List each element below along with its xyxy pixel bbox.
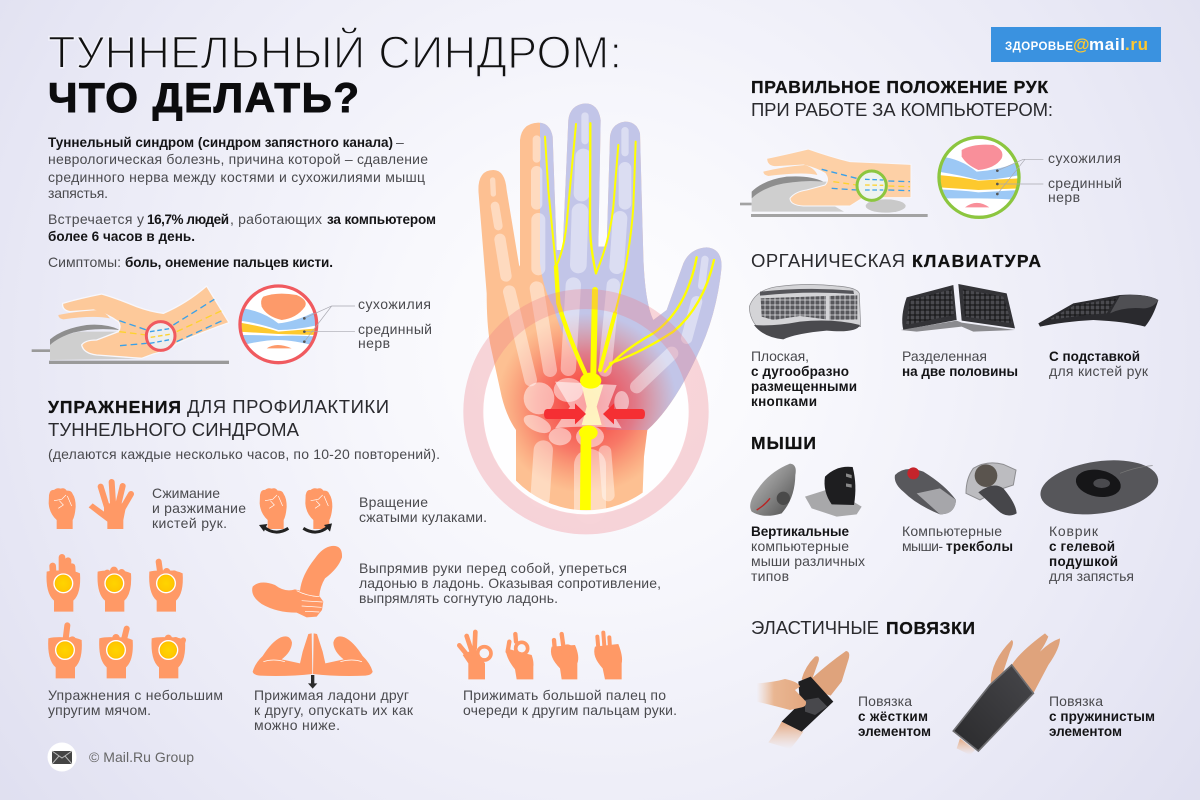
exercise captions: ладонью в ладонь. Оказывая сопротивление,	[359, 575, 661, 591]
bandage captions: с жёстким	[858, 709, 928, 724]
intro text: 16,7% людей	[147, 212, 229, 227]
icon: thumb to finger hands	[459, 632, 622, 679]
keyboard: with rest	[1038, 295, 1158, 327]
exercise captions: Сжимание	[152, 485, 220, 501]
compressed tunnel	[555, 382, 622, 428]
intro text: за компьютером	[327, 212, 436, 227]
heading: elastic bandages	[751, 617, 975, 638]
mice captions: компьютерные	[751, 538, 849, 554]
correct wrist labels: сухожилия	[1048, 150, 1121, 166]
mouse: vertical black	[805, 467, 862, 517]
keyboard captions: размещенными	[751, 379, 857, 394]
mice captions: трекболы	[946, 539, 1013, 554]
exercise captions: сжатыми кулаками.	[359, 509, 487, 525]
correct wrist labels	[1048, 150, 1122, 205]
logo: ЗДОРОВЬЕ	[1005, 41, 1073, 53]
wrist diagram: wrong position	[32, 286, 355, 364]
intro text: –	[396, 134, 404, 150]
heading: correct position: ПРАВИЛЬНОЕ ПОЛОЖЕНИЕ РУК	[751, 77, 1048, 97]
exercise captions	[48, 485, 677, 733]
ring background	[483, 308, 689, 515]
mice and pad photos	[750, 453, 1162, 521]
keyboard captions: Плоская,	[751, 348, 809, 364]
bandage captions: Повязка	[1049, 693, 1103, 709]
intro text	[48, 134, 436, 270]
bandage captions: элементом	[1049, 724, 1122, 739]
heading: correct position	[751, 77, 1053, 120]
mouse: vertical silver	[750, 464, 796, 516]
keyboard captions: для кистей рук	[1049, 363, 1149, 379]
bones	[493, 116, 705, 508]
wrist diagram: correct position	[740, 137, 1043, 217]
hand silhouette	[478, 104, 722, 510]
exercise captions: выпрямлять согнутую ладонь.	[359, 590, 558, 606]
mice captions: типов	[751, 568, 789, 584]
exercise captions: Вращение	[359, 494, 428, 510]
mice captions: с гелевой	[1049, 539, 1115, 554]
intro text: Туннельный синдром (синдром запястного канала)	[48, 135, 393, 150]
icon: fist and open hand	[49, 482, 131, 529]
intro text: срединного нерва между костями и сухожилиями мышц	[48, 169, 425, 185]
exercises heading: (делаются каждые несколько часов, по 10-20 повторений).	[48, 446, 440, 462]
median nerve	[545, 123, 714, 510]
keyboard: curved flat	[749, 284, 861, 339]
keyboard captions: с дугообразно	[751, 364, 849, 379]
mice captions	[751, 523, 1134, 584]
mice captions: мыши-	[902, 538, 943, 554]
icon: pressed palms	[253, 633, 373, 689]
wrist diagram labels: срединный	[358, 321, 432, 337]
bandage captions: с пружинистым	[1049, 709, 1155, 724]
wrist diagram labels	[358, 296, 432, 351]
logo: .ru	[1125, 35, 1148, 54]
exercise captions: Прижимая ладони друг	[254, 687, 409, 703]
intro text: Встречается у	[48, 211, 144, 227]
exercise captions: можно ниже.	[254, 717, 340, 733]
keyboard captions: С подставкой	[1049, 349, 1140, 364]
logo: mail	[1089, 35, 1125, 54]
exercises heading: УПРАЖНЕНИЯ	[48, 397, 181, 417]
icon: rotating fists	[259, 488, 332, 532]
keyboard photos	[749, 284, 1158, 339]
exercises heading: ТУННЕЛЬНОГО СИНДРОМА	[48, 419, 300, 440]
exercise captions: к другу, опускать их как	[254, 702, 414, 718]
heading: mice: МЫШИ	[751, 433, 816, 453]
intro text: , работающих	[230, 211, 322, 227]
heading: elastic bandages: ЭЛАСТИЧНЫЕ	[751, 617, 879, 638]
trackball large	[966, 463, 1017, 516]
exercise captions: упругим мячом.	[48, 702, 151, 718]
ring	[473, 299, 699, 524]
bandage captions: Повязка	[858, 693, 912, 709]
exercise captions: Упражнения с небольшим	[48, 687, 223, 703]
mice captions: Коврик	[1049, 523, 1099, 539]
bandage captions: элементом	[858, 724, 931, 739]
intro text: Симптомы:	[48, 254, 121, 270]
exercise captions: кистей рук.	[152, 515, 227, 531]
exercise captions: и разжимание	[152, 500, 246, 516]
correct wrist labels: нерв	[1048, 189, 1080, 205]
central hand illustration	[463, 104, 722, 534]
title: ЧТО ДЕЛАТЬ?	[48, 74, 359, 121]
keyboard captions	[751, 348, 1149, 409]
exercises heading: ДЛЯ ПРОФИЛАКТИКИ	[187, 396, 389, 417]
heading: elastic bandages: ПОВЯЗКИ	[886, 618, 975, 638]
footer: mail icon and copyright: © Mail.Ru Group	[89, 749, 194, 765]
mice captions: Компьютерные	[902, 523, 1002, 539]
intro text: неврологическая болезнь, причина которой – сдавление	[48, 151, 428, 167]
correct wrist labels: срединный	[1048, 175, 1122, 191]
intro text: боль, онемение пальцев кисти.	[125, 255, 333, 270]
photo: rigid wrist support	[757, 651, 849, 749]
intro text: запястья.	[48, 185, 108, 201]
compression arrows	[544, 403, 645, 424]
footer: mail icon and copyright	[48, 742, 194, 772]
exercises heading	[48, 396, 440, 462]
wrist diagram labels: сухожилия	[358, 296, 431, 312]
title: ТУННЕЛЬНЫЙ СИНДРОМ:	[48, 27, 622, 78]
exercise captions: Выпрямив руки перед собой, упереться	[359, 560, 627, 576]
bandage photos	[757, 633, 1060, 755]
mice captions: Вертикальные	[751, 524, 849, 539]
heading: correct position: ПРИ РАБОТЕ ЗА КОМПЬЮТЕРОМ:	[751, 99, 1053, 120]
mice captions: для запястья	[1049, 568, 1134, 584]
logo: @	[1073, 35, 1090, 54]
trackball mouse	[895, 467, 956, 514]
exercise captions: очереди к другим пальцам руки.	[463, 702, 677, 718]
icon group: palms together and OK hands	[253, 632, 622, 689]
intro text: более 6 часов в день.	[48, 229, 195, 244]
keyboard captions: на две половины	[902, 364, 1018, 379]
wrist diagram labels: нерв	[358, 335, 390, 351]
exercise captions: Прижимать большой палец по	[463, 687, 666, 703]
icon group: exercise hands	[46, 482, 342, 678]
keyboard: split	[901, 284, 1015, 332]
title	[48, 27, 622, 121]
photo: elastic wrist sleeve	[953, 633, 1060, 755]
keyboard captions: кнопками	[751, 394, 817, 409]
heading: keyboards: КЛАВИАТУРА	[912, 251, 1041, 271]
mice captions: мыши различных	[751, 553, 865, 569]
heading: keyboards: ОРГАНИЧЕСКАЯ	[751, 250, 905, 271]
heading: keyboards	[751, 250, 1041, 271]
icon: arm press	[252, 546, 342, 617]
mice captions: подушкой	[1049, 554, 1118, 569]
gel mouse pad	[1037, 453, 1162, 521]
keyboard captions: Разделенная	[902, 348, 987, 364]
bandage captions	[858, 693, 1155, 739]
icon: balls on hands	[46, 557, 185, 678]
logo	[991, 27, 1161, 62]
